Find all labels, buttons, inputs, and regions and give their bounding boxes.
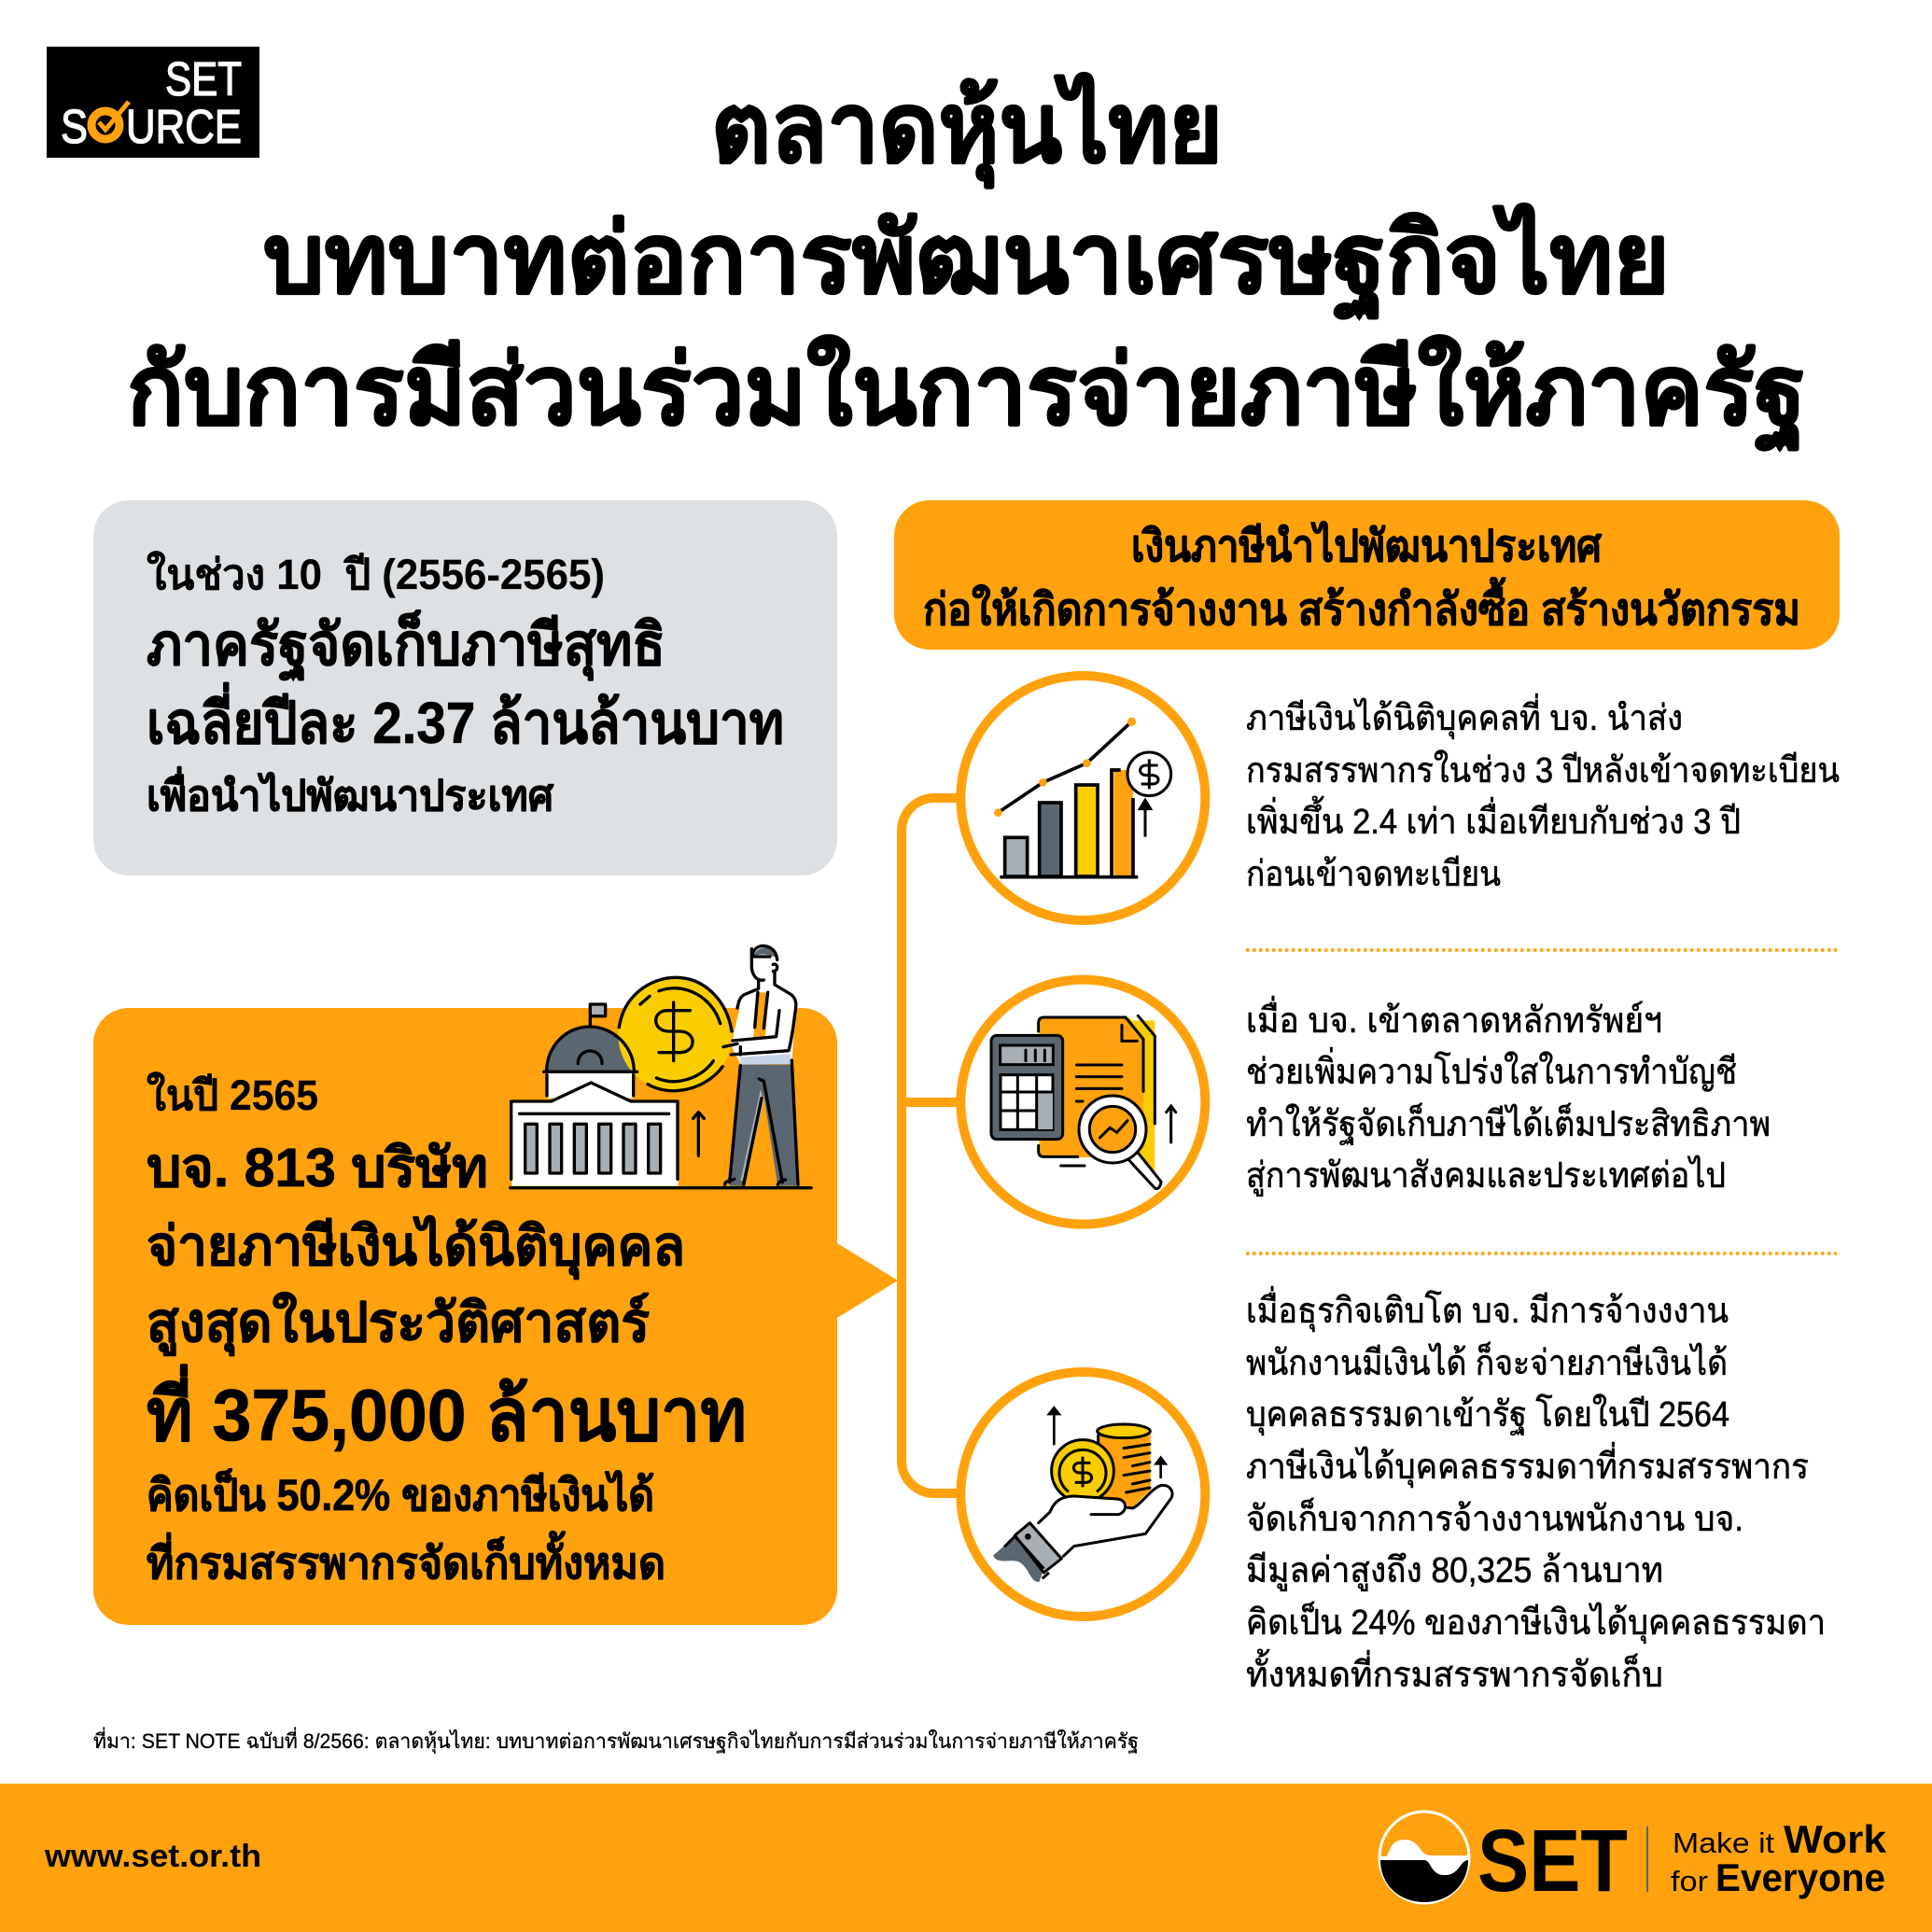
panel: 2022 corporate tax callout: สูงสุดในประวัติศาสตร์ — [147, 1291, 650, 1357]
logo: SET SOURCE: URCE — [126, 100, 242, 153]
panel: 2022 corporate tax callout: บจ. 813 บริษัท — [147, 1138, 488, 1198]
logo: SET Make it Work for Everyone: Everyone — [1715, 1855, 1885, 1899]
text block: employment and personal income tax: คิดเป็น 24% ของภาษีเงินได้บุคคลธรรมดา — [1246, 1601, 1826, 1644]
logo: SET Make it Work for Everyone: SET — [1477, 1812, 1628, 1911]
connector lines — [902, 798, 971, 1493]
text block: accounting transparency: ช่วยเพิ่มความโปร่งใสในการทำบัญชี — [1246, 1047, 1737, 1092]
title — [127, 73, 1806, 455]
panel: tax collection summary: เฉลี่ยปีละ 2.37 ล้านล้านบาท — [147, 682, 784, 756]
panel: tax funds headline: ก่อให้เกิดการจ้างงาน สร้างกำลังซื้อ สร้างนวัตกรรม — [923, 577, 1800, 634]
text block: accounting transparency: สู่การพัฒนาสังคมและประเทศต่อไป — [1246, 1155, 1726, 1197]
logo: SET SOURCE: S — [61, 100, 88, 153]
panel: tax collection summary: ภาครัฐจัดเก็บภาษีสุทธิ — [147, 609, 665, 682]
text block: accounting transparency: ทำให้รัฐจัดเก็บภาษีได้เต็มประสิทธิภาพ — [1246, 1102, 1771, 1145]
panel: tax funds headline — [894, 500, 1840, 650]
panel: tax collection summary: เพื่อนำไปพัฒนาประเทศ — [147, 766, 554, 819]
logo: SET SOURCE: SET — [165, 52, 242, 105]
text block: corporate tax after listing — [1246, 693, 1840, 894]
text block: corporate tax after listing: กรมสรรพากรในช่วง 3 ปีหลังเข้าจดทะเบียน — [1246, 750, 1840, 791]
panel: tax collection summary — [93, 500, 837, 875]
panel: tax funds headline: เงินภาษีนำไปพัฒนาประเทศ — [1131, 520, 1603, 570]
logo: SET Make it Work for Everyone: for — [1671, 1865, 1708, 1897]
text block: employment and personal income tax: ทั้งหมดที่กรมสรรพากรจัดเก็บ — [1246, 1648, 1663, 1695]
text block: corporate tax after listing: ก่อนเข้าจดทะเบียน — [1246, 855, 1501, 894]
panel: 2022 corporate tax callout: คิดเป็น 50.2% ของภาษีเงินได้ — [147, 1467, 654, 1519]
text block: employment and personal income tax: จัดเก็บจากการจ้างงานพนักงาน บจ. — [1246, 1497, 1743, 1539]
website: www.set.or.th — [44, 1839, 261, 1874]
panel: tax collection summary: ในช่วง 10 ปี (2556-2565) — [147, 550, 605, 598]
icon: government building, coin and businessman — [511, 945, 811, 1188]
title: กับการมีส่วนร่วมในการจ่ายภาษีให้ภาครัฐ — [127, 335, 1806, 455]
source note: ที่มา: SET NOTE ฉบับที่ 8/2566: ตลาดหุ้นไทย: บทบาทต่อการพัฒนาเศรษฐกิจไทยกับการมีส่วนร่วมในการจ่ายภาษีให้ภาครัฐ — [93, 1727, 1139, 1754]
panel: 2022 corporate tax callout: ที่กรมสรรพากรจัดเก็บทั้งหมด — [147, 1531, 665, 1588]
footer band — [0, 1784, 1932, 1932]
icon: circle with calculator, document and magnifier — [960, 980, 1205, 1225]
text block: accounting transparency: เมื่อ บจ. เข้าตลาดหลักทรัพย์ฯ — [1246, 996, 1662, 1041]
title: ตลาดหุ้นไทย — [711, 73, 1223, 189]
text block: accounting transparency — [1246, 996, 1771, 1197]
panel: 2022 corporate tax callout — [93, 1008, 898, 1625]
text block: employment and personal income tax: เมื่อธุรกิจเติบโต บจ. มีการจ้างงงาน — [1246, 1286, 1729, 1332]
logo: SET Make it Work for Everyone — [1379, 1812, 1887, 1911]
icon: circle with bar chart — [960, 676, 1205, 920]
logo: SET Make it Work for Everyone: Work — [1784, 1817, 1887, 1861]
text block: employment and personal income tax: บุคคลธรรมดาเข้ารัฐ โดยในปี 2564 — [1246, 1393, 1729, 1435]
text block: employment and personal income tax: พนักงานมีเงินได้ ก็จะจ่ายภาษีเงินได้ — [1246, 1341, 1728, 1383]
text block: employment and personal income tax: มีมูลค่าสูงถึง 80,325 ล้านบาท — [1246, 1551, 1663, 1591]
icon: circle with hand holding coins — [960, 1372, 1205, 1617]
text block: corporate tax after listing: ภาษีเงินได้นิติบุคคลที่ บจ. นำส่ง — [1246, 693, 1683, 739]
title: บทบาทต่อการพัฒนาเศรษฐกิจไทย — [263, 203, 1670, 323]
panel: 2022 corporate tax callout: จ่ายภาษีเงินได้นิติบุคคล — [147, 1215, 685, 1281]
panel: 2022 corporate tax callout: ที่ 375,000 ล้านบาท — [147, 1364, 747, 1456]
text block: employment and personal income tax: ภาษีเงินได้บุคคลธรรมดาที่กรมสรรพากร — [1246, 1442, 1809, 1488]
logo: SET Make it Work for Everyone: Make it — [1673, 1827, 1774, 1859]
text block: employment and personal income tax — [1246, 1286, 1826, 1695]
logo: SET SOURCE — [47, 47, 259, 158]
panel: 2022 corporate tax callout: ในปี 2565 — [147, 1071, 318, 1119]
text block: corporate tax after listing: เพิ่มขึ้น 2.4 เท่า เมื่อเทียบกับช่วง 3 ปี — [1246, 795, 1741, 842]
